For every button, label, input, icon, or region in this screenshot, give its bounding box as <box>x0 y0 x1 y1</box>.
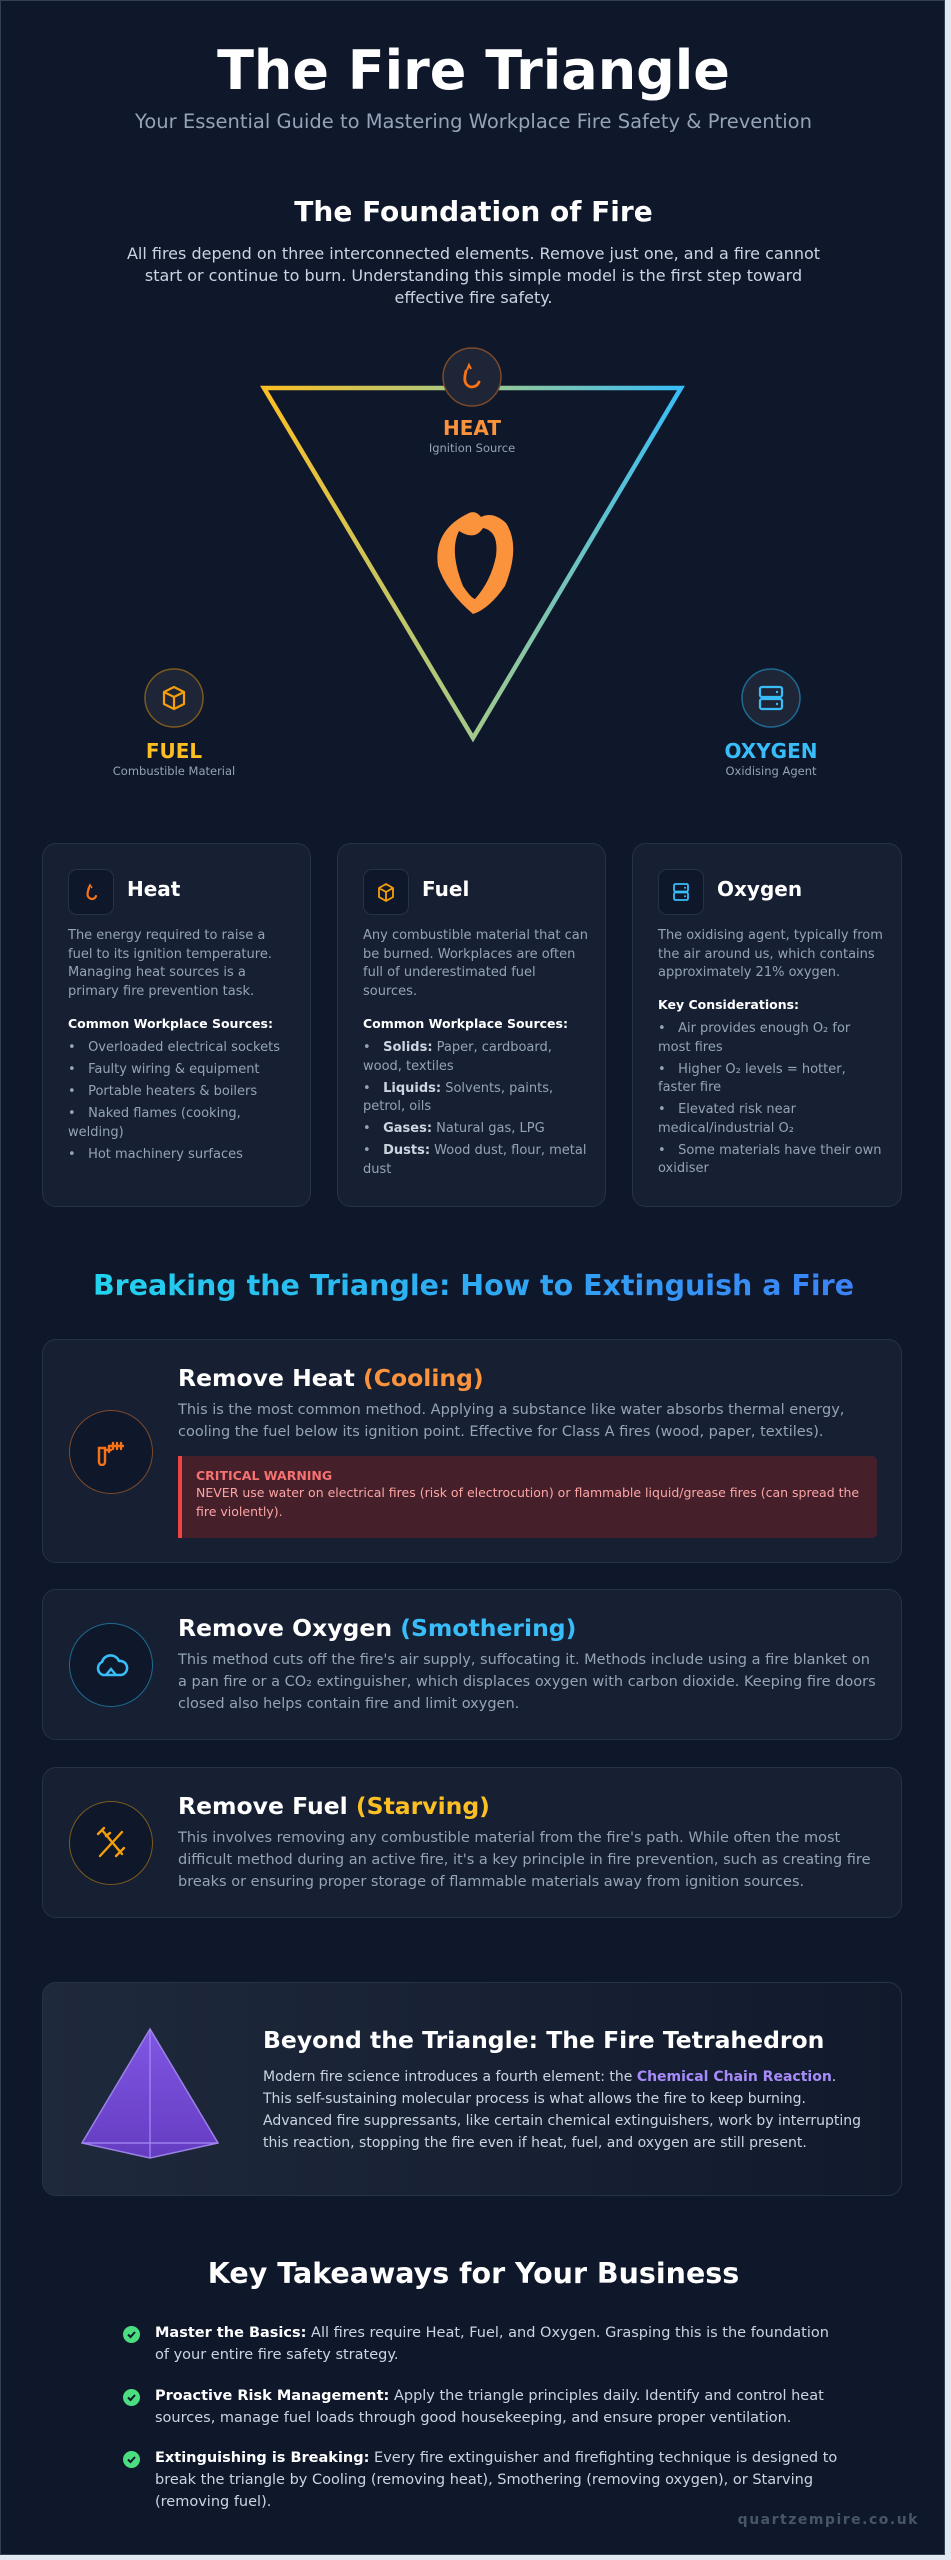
takeaway 3 <box>123 2450 837 2510</box>
card title: Fuel <box>422 877 469 901</box>
card description: Any combustible material that can be burned. Workplaces are often full of underestimated fuel sources. <box>363 928 588 999</box>
callout: critical warning: NEVER use water on electrical fires (risk of electrocution) or flammable liquid/grease fires (can spread the fire violently). <box>196 1485 859 1519</box>
panel: remove oxygen <box>42 1589 902 1740</box>
list: • Gases: Natural gas, LPG <box>363 1121 545 1136</box>
list <box>68 1040 280 1162</box>
list: • Air provides enough O₂ for most fires <box>658 1021 850 1054</box>
icon: tetrahedron <box>80 2028 220 2159</box>
method title: Remove Oxygen (Smothering) <box>178 1614 576 1642</box>
heading: breaking the triangle: Breaking the Triangle: How to Extinguish a Fire <box>93 1269 854 1302</box>
panel: remove heat <box>42 1339 902 1563</box>
card description: The oxidising agent, typically from the air around us, which contains approximately 21% oxygen. <box>658 928 883 980</box>
subheading: Key Considerations: <box>658 997 799 1012</box>
subheading: Common Workplace Sources: <box>363 1016 568 1031</box>
intro paragraph: All fires depend on three interconnected elements. Remove just one, and a fire cannot start or continue to burn. Understanding this simple model is the first step toward effective fire safety. <box>127 244 820 307</box>
takeaway 3: break the triangle by Cooling (removing heat), Smothering (removing oxygen), or Starving (removing fuel). <box>155 2472 813 2510</box>
icon: extinguisher <box>69 1410 153 1494</box>
list <box>363 1040 586 1176</box>
footer brand: quartzempire.co.uk <box>738 2512 919 2528</box>
label: fuel: Combustible Material <box>113 764 235 778</box>
takeaway 1 <box>123 2325 829 2363</box>
icon: fuel <box>363 869 409 915</box>
icon: heat <box>68 869 114 915</box>
list: • Hot machinery surfaces <box>68 1146 243 1162</box>
label: fuel <box>113 739 235 778</box>
label: oxygen <box>724 739 818 778</box>
label: heat <box>429 416 515 455</box>
heading: key takeaways: Key Takeaways for Your Business <box>208 2257 739 2290</box>
panel: remove fuel <box>42 1767 902 1918</box>
list: • Solids: Paper, cardboard, wood, textiles <box>363 1040 552 1074</box>
icon: crossed tools <box>69 1801 153 1885</box>
icon: fuel node <box>145 669 203 727</box>
icon: heat node <box>443 348 501 406</box>
subtitle: Your Essential Guide to Mastering Workplace Fire Safety & Prevention <box>135 110 812 133</box>
list: • Elevated risk near medical/industrial O₂ <box>658 1102 796 1136</box>
list: • Some materials have their own oxidiser <box>658 1142 882 1176</box>
tetra title: Beyond the Triangle: The Fire Tetrahedron <box>263 2026 824 2054</box>
method title: Remove Fuel (Starving) <box>178 1792 490 1820</box>
takeaway 2 <box>123 2388 824 2426</box>
panel: tetrahedron <box>42 1982 902 2196</box>
list: • Naked flames (cooking, welding) <box>68 1106 241 1140</box>
panel: heat card <box>42 843 311 1207</box>
icon: oxygen node <box>742 669 800 727</box>
takeaway 1: Master the Basics: All fires require Heat, Fuel, and Oxygen. Grasping this is the foundation <box>155 2325 829 2341</box>
list: • Liquids: Solvents, paints, petrol, oils <box>363 1080 553 1114</box>
list: • Higher O₂ levels = hotter, faster fire <box>658 1062 846 1095</box>
panel: oxygen card <box>632 843 902 1207</box>
panel: fuel card <box>337 843 606 1207</box>
tetra text: Modern fire science introduces a fourth element: the Chemical Chain Reaction. <box>263 2069 836 2085</box>
card title: Oxygen <box>717 877 802 901</box>
label: heat: HEAT <box>443 416 501 440</box>
takeaway 2: sources, manage fuel loads through good housekeeping, and ensure proper ventilation. <box>155 2410 791 2426</box>
callout: critical warning <box>178 1456 877 1538</box>
method description: This is the most common method. Applying a substance like water absorbs thermal energy, cooling the fuel below its ignition point. Effective for Class A fires (wood, paper, textiles). <box>178 1402 844 1440</box>
triangle outline <box>264 388 681 738</box>
card description: The energy required to raise a fuel to its ignition temperature. Managing heat sources is a primary fire prevention task. <box>68 928 272 999</box>
list: • Dusts: Wood dust, flour, metal dust <box>363 1143 586 1176</box>
card title: Heat <box>127 877 180 901</box>
method description: This method cuts off the fire's air supply, suffocating it. Methods include using a fire blanket on a pan fire or a CO₂ extinguisher, which displaces oxygen with carbon dioxide. Keeping fire doors closed also helps contain fire and limit oxygen. <box>178 1652 876 1712</box>
takeaway 1: of your entire fire safety strategy. <box>155 2347 398 2363</box>
icon: flame <box>437 512 513 614</box>
method title: Remove Heat (Cooling) <box>178 1364 484 1392</box>
subheading: Common Workplace Sources: <box>68 1016 273 1031</box>
triangle diagram <box>113 347 818 778</box>
method description: This involves removing any combustible material from the fire's path. While often the most difficult method during an active fire, it's a key principle in fire prevention, such as creating fire breaks or ensuring proper storage of flammable materials away from ignition sources. <box>178 1830 870 1890</box>
icon: cloud <box>69 1623 153 1707</box>
callout: critical warning: CRITICAL WARNING <box>196 1468 332 1483</box>
label: oxygen: Oxidising Agent <box>725 764 817 778</box>
list: • Portable heaters & boilers <box>68 1084 257 1099</box>
list: • Overloaded electrical sockets <box>68 1040 280 1055</box>
icon: oxygen <box>658 869 704 915</box>
tetra text: This self-sustaining molecular process is what allows the fire to keep burning. Advanced fire suppressants, like certain chemical extinguishers, work by interrupting this reaction, stopping the fire even if heat, fuel, and oxygen are still present. <box>263 2091 861 2151</box>
label: heat: Ignition Source <box>429 441 515 455</box>
label: fuel: FUEL <box>146 739 202 763</box>
title: The Fire Triangle <box>217 39 730 102</box>
takeaway 2: Proactive Risk Management: Apply the triangle principles daily. Identify and control heat <box>155 2388 824 2404</box>
list: • Faulty wiring & equipment <box>68 1062 260 1077</box>
heading: foundation: The Foundation of Fire <box>294 195 653 228</box>
label: oxygen: OXYGEN <box>724 739 818 763</box>
list <box>658 1021 882 1176</box>
takeaway 3: Extinguishing is Breaking: Every fire extinguisher and firefighting technique is designed to <box>155 2450 837 2466</box>
